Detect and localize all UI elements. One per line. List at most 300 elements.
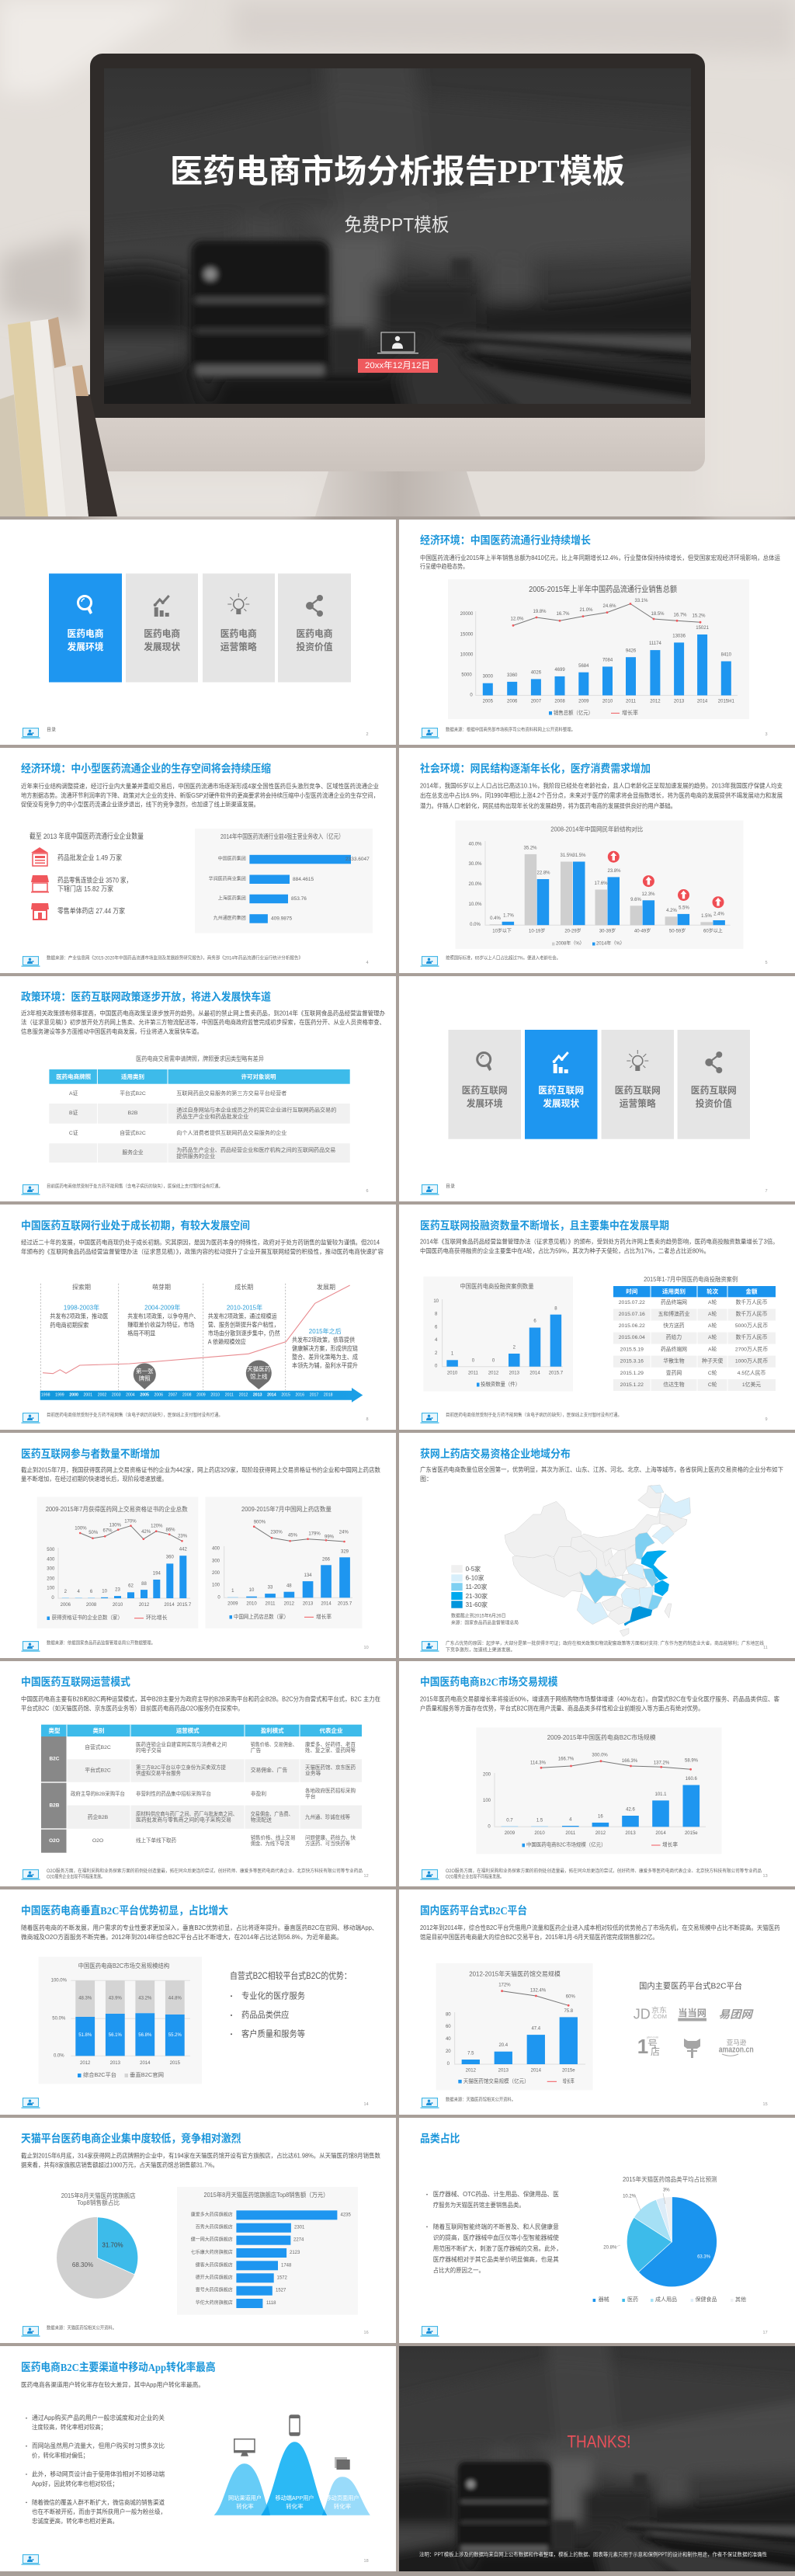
table rows: A轮 (708, 1333, 717, 1340)
footer: O2O服务方面，在福利采购和业务探索方面的前例处创造量最，拓在同众后更连的尝试，创好药师、康爱多等医药电商代表企业、北京快方科技有限公司等专业药品 (47, 1868, 363, 1874)
chart panel: case count (423, 1277, 573, 1392)
pie chart: categories (627, 2197, 717, 2287)
intro text (420, 1238, 779, 1255)
pie legend: 医药 (627, 2296, 638, 2303)
x axis labels: 2006 (507, 699, 518, 704)
trend line (43, 1285, 350, 1374)
bar values: 266 (322, 1557, 331, 1562)
wall background (0, 0, 795, 516)
row: enterprise B2B: 物流配送 (251, 1816, 272, 1823)
x axis labels (80, 2061, 181, 2066)
bullet text: 占比大的原因之一。 (433, 2266, 484, 2274)
chart panel: age structure (455, 820, 744, 949)
chart panel: online pharmacies (205, 1497, 362, 1629)
enterprise counts: 下辖门店 15.82 万家 (57, 884, 113, 893)
store labels: 华佗大药房旗舰店 (196, 2300, 233, 2306)
row: government B2B: 政府主导的B2B采购平台 (71, 1790, 125, 1797)
legend (552, 940, 625, 947)
growth line: 23% (178, 1535, 188, 1539)
footer (421, 727, 768, 739)
footer: 7 (765, 1189, 768, 1194)
growth line: 137.2% (654, 1761, 670, 1766)
pie labels: 20.8% (603, 2245, 617, 2250)
footer (22, 2098, 369, 2108)
slide 8: growth stages timeline (0, 1205, 396, 1430)
heading: 国内医药平台式B2C平台 (420, 1904, 527, 1917)
arrow: year axis: 2000 (69, 1392, 78, 1397)
legend: 增长率 (622, 709, 638, 716)
y axis (433, 1299, 563, 1369)
x axis labels: 2013 (303, 1602, 314, 1607)
map legend: 0-5家 (466, 1565, 481, 1573)
arrow: year axis: 2014 (267, 1392, 276, 1397)
footer: 数据来源：天猫医药馆相关公开资料。 (446, 2097, 516, 2103)
footer (22, 727, 369, 739)
slide 7: contents two (399, 976, 795, 1201)
footer: 16 (364, 2331, 369, 2335)
chart panel: certificates (37, 1497, 198, 1629)
bar values: 4.2% (666, 909, 677, 913)
row: self-run B2C (85, 1741, 356, 1754)
arrow: year axis: 1998 (41, 1392, 50, 1397)
footer: 数据来源：天猫医药馆相关公开资料。 (47, 2325, 116, 2331)
logo: yhd: yhd.com (647, 2035, 659, 2039)
table rows: 2015.07.16 (619, 1312, 645, 1317)
intro text (21, 1466, 380, 1483)
map legend: 6-10家 (466, 1573, 484, 1581)
intro text: 医药电商各渠道用户转化率存在较大差异，其中App用户转化率最高。 (21, 2381, 204, 2389)
pin: first licence: 牌照 (139, 1375, 151, 1382)
stage 2 text: 共发布1项政策，以争夺用户、 (127, 1312, 199, 1320)
menu card: strategy: 医药电商 (220, 627, 257, 639)
table rows: 信达生物 (663, 1381, 685, 1388)
legend: 2014年（%） (596, 940, 625, 947)
y axis: 4 (435, 1338, 438, 1343)
store labels: 康爱多大药房旗舰店 (191, 2211, 233, 2217)
footer: 8 (366, 1417, 369, 1422)
x axis labels: 40-49岁 (634, 928, 651, 934)
growth line: 18.5% (651, 612, 665, 617)
row: self-run B2C: 自营式B2C (85, 1743, 111, 1750)
growth line: 33.1% (634, 599, 648, 603)
table title: 2015年1-7月中国医药电商投融资案例 (644, 1275, 738, 1283)
segment values (78, 1996, 182, 2038)
icon: up arrows (608, 851, 724, 908)
x axis labels: 2012 (80, 2061, 91, 2066)
growth line: 120% (151, 1524, 163, 1528)
arrow: year axis: 2012 (239, 1392, 248, 1397)
growth line: 114.3% (530, 1761, 547, 1766)
curves: channel conversion: 网站渠道用户 (228, 2494, 262, 2501)
date tag (358, 359, 438, 373)
menu card: strategy (602, 1030, 674, 1139)
x axis labels: 2012 (466, 2069, 477, 2074)
advantages list: 药品品类供应 (241, 2009, 289, 2020)
menu card: value: 投资价值 (297, 641, 332, 652)
bars (483, 634, 731, 695)
chart title: 2009-2015年7月获得医药网上交易资格证书的企业总数 (46, 1505, 188, 1513)
menu card: environment: 医药互联网 (462, 1084, 508, 1096)
footer: 14 (364, 2102, 369, 2107)
timeline (40, 1283, 363, 1403)
bars 2014 (502, 862, 725, 925)
x axis labels (505, 1831, 698, 1836)
x axis labels: 2010 (246, 1602, 257, 1607)
y axis: 6 (435, 1325, 438, 1330)
table header: 盈利模式 (261, 1726, 284, 1734)
curves: channel conversion: 转化率 (236, 2502, 254, 2510)
intro text: 平台式B2C（如天猫医药馆、京东医药业务等）目前医药电商药品O2O服务仍在探索中。 (21, 1704, 244, 1712)
stage 1 text: 1998-2003年 (64, 1303, 99, 1311)
bar values: 1.5 (536, 1818, 543, 1823)
stage 2 text: 2004-2009年 (144, 1303, 180, 1311)
logo: JD: 京东 (651, 2005, 667, 2015)
enterprise counts: 零售单体药店 27.44 万家 (57, 906, 125, 915)
curves: channel conversion: 移动页面用户 (326, 2494, 359, 2501)
y axis: 10000 (460, 652, 474, 657)
bar values (467, 2009, 574, 2056)
x axis labels: 10-19岁 (529, 928, 545, 934)
bar values: 5.5% (679, 906, 689, 910)
bar values: 160.6 (686, 1777, 697, 1782)
slide 9: financing (399, 1205, 795, 1430)
bullet text: App好，因此转化率也相对较低； (32, 2480, 118, 2487)
x axis labels: 2014 (140, 2061, 151, 2066)
x axis labels: 2012 (595, 1831, 606, 1836)
bars (249, 855, 351, 923)
wall shadows (0, 0, 795, 516)
intro text: 据来看，共有8家旗舰店销售额超过1000万元，占天猫医药馆总销售额31.7%。 (21, 2161, 218, 2168)
monitor (73, 45, 722, 516)
arrow: year axis: 2011 (225, 1392, 234, 1397)
table rows: 提供服务的企业 (176, 1152, 216, 1159)
row: enterprise B2B: 医药批发商与零售商之间的电子采购交易 (136, 1816, 231, 1823)
stage 3 text: 2010-2015年 (227, 1303, 262, 1311)
y axis: 0.0% (470, 923, 481, 927)
bars (502, 1785, 700, 1827)
bar values: 8 (554, 1306, 557, 1311)
row: self-run B2C: 广告 (251, 1747, 261, 1754)
bar values: 2 (64, 1590, 68, 1594)
bullet text: 识的提高，医疗器械中血压仪等小型智能器械使 (433, 2234, 559, 2241)
table rows: A轮 (708, 1310, 717, 1317)
menu card: status (126, 573, 198, 682)
bullet text: 忠诚度更高，转化率也相对更高。 (32, 2517, 118, 2525)
arrow: year axis: 2002 (98, 1392, 106, 1397)
arrow: year axis: 2016 (296, 1392, 304, 1397)
table rows: 通过自身网站与本企业成员之外的其它企业进行互联网药品交易的 (176, 1106, 337, 1114)
bars 2008 (490, 854, 713, 925)
cover title: 医药电商市场分析报告PPT模板 (170, 154, 625, 190)
table header: 适用类别 (121, 1072, 144, 1080)
row: platform B2C: 平台式B2C (85, 1766, 111, 1774)
bars (446, 1315, 561, 1367)
footer: 广东占优势的原因：起步早，大部分是第一批获得许可证；政府在相关政策扣物流配套政策等方面相对支持; 广东作为医药制造业大省，商品能够利；广东地区线 (446, 1640, 764, 1646)
legend: 投融资数量（件） (481, 1381, 520, 1387)
footer: 目录 (47, 727, 56, 733)
heading: 医药互联网参与者数量不断增加 (21, 1448, 160, 1461)
heading: 社会环境：网民结构逐渐年长化，医疗消费需求增加 (420, 763, 651, 775)
chart panel: stacked share (39, 1957, 202, 2084)
footer: 数据来源：依据国家食品药品监督管理总局公开数据整理。 (47, 1640, 155, 1646)
table rows: B证 (69, 1110, 78, 1116)
bar values: 88 (141, 1582, 147, 1587)
blue bars (75, 2013, 185, 2056)
y axis: 400 (212, 1546, 220, 1551)
x axis labels: 2014 (529, 1371, 540, 1375)
chart title: 2012-2015年天猫医药馆交易规模 (469, 1969, 561, 1977)
pin: tmall online: 天猫医药 (247, 1365, 271, 1373)
intro text: 中国医药电商主要有B2B和B2C两种运营模式，其中B2B主要分为政府主导的B2B采购平台和药企B2B。B2C分为自营式和平台式，B2C 主力在 (21, 1695, 380, 1702)
growth line: 19.8% (533, 610, 547, 614)
logo: tmall cat (684, 2039, 700, 2058)
bar values: 23 (115, 1588, 120, 1593)
row: government B2B: 非盈利 (251, 1790, 266, 1797)
icon: chain store (31, 875, 49, 893)
growth line: 58.9% (685, 1759, 699, 1764)
footer (22, 955, 369, 967)
bar values: 0 (492, 1358, 495, 1363)
chart title: 中国医药电商投融资案例数量 (460, 1282, 534, 1290)
row: platform B2C: 第三方B2C平台以中立身份为买卖双方提 (136, 1764, 226, 1771)
y axis (460, 611, 738, 697)
x axis labels: 2015 (170, 2061, 181, 2066)
logo: JD (634, 2005, 667, 2022)
y axis: 30.0% (468, 862, 482, 867)
bar values: 1748 (281, 2263, 292, 2268)
table header: 适用类别 (662, 1288, 686, 1295)
row: platform B2C: 交易佣金、广告 (251, 1766, 287, 1774)
bars (227, 1557, 350, 1597)
slide 15: platform B2C (399, 1889, 795, 2115)
bar values: 12.3% (641, 892, 655, 897)
pin: tmall online: 馆上线 (250, 1372, 268, 1380)
table rows: 服务企业 (122, 1149, 144, 1156)
heading: 中国医药互联网运营模式 (21, 1676, 130, 1688)
bar values: 1 (451, 1352, 454, 1357)
bar values: 31.5% (572, 853, 586, 858)
x axis labels: 2006 (61, 1603, 71, 1608)
table rows (619, 1298, 768, 1388)
bullet text: 价，转化率相对偏低； (32, 2451, 89, 2459)
x axis labels: 2007 (531, 699, 542, 704)
y axis (51, 1978, 190, 2058)
bar values: 3000 (483, 674, 494, 679)
row: government B2B: 各地政府医药招标采购 (305, 1787, 356, 1794)
y axis (446, 2012, 585, 2067)
footer: 17 (763, 2331, 768, 2335)
growth line: 45% (288, 1534, 298, 1538)
table rows: 种子天使 (702, 1358, 723, 1364)
bar labels: 华润医药商业集团 (209, 875, 246, 881)
bar values (266, 2213, 352, 2306)
row: government B2B: 平台 (305, 1792, 316, 1800)
row: platform B2C (85, 1764, 356, 1777)
menu card: active status: 医药互联网 (538, 1084, 584, 1096)
table rows: 药品生产企业和药品批发企业 (176, 1113, 249, 1120)
icon: presenter laptop (377, 332, 418, 354)
table header (626, 1288, 758, 1295)
growth line: 24.6% (602, 604, 616, 609)
table header: 轮次 (706, 1288, 719, 1295)
table rows: 4.5亿人民币 (738, 1369, 766, 1376)
arrow: year axis: 2009 (196, 1392, 206, 1397)
growth line (75, 1519, 188, 1542)
pie chart: top eight share (57, 2217, 138, 2299)
footer (421, 1184, 768, 1195)
bar labels: 中国医药集团 (218, 856, 246, 862)
menu card: active status (525, 1030, 598, 1139)
x axis labels (61, 1603, 192, 1608)
footer: 12 (364, 1874, 369, 1879)
store labels: 德开大药房旗舰店 (196, 2274, 233, 2280)
legend (230, 1613, 332, 1620)
row: O2O (92, 1834, 356, 1847)
x axis labels (483, 699, 734, 704)
legend: 综合B2C平台 (83, 2071, 116, 2078)
stage 1 text: 共发布2项政策，推动医 (50, 1312, 108, 1320)
bar values: 2123 (290, 2251, 300, 2255)
store labels: 健一网大药房旗舰店 (191, 2237, 233, 2243)
stage 1 text: 药电商初期探索 (50, 1321, 89, 1329)
table rows: 自营式B2C (120, 1129, 146, 1136)
growth line (510, 599, 706, 627)
pie title (61, 2192, 136, 2206)
legend: 增长率 (662, 1841, 678, 1848)
footer: 2 (366, 732, 369, 737)
x axis labels: 2013 (509, 1371, 520, 1375)
footer: O2O服务方面，在福利采购和业务探索方面的前例处创造量最，拓在同众后更连的尝试，创好药师、康爱多等医药电商代表企业、北京快方科技有限公司等专业药品 (446, 1868, 762, 1874)
y axis: 300 (212, 1559, 220, 1564)
bar values: 0.4% (490, 916, 501, 921)
bar values: 6 (90, 1590, 93, 1594)
segment values: 56.1% (109, 2033, 122, 2038)
bar labels: 853.76 (291, 896, 307, 902)
row: self-run B2C: 的电子交易 (136, 1747, 161, 1754)
intro text (420, 1695, 779, 1712)
growth line: 170% (124, 1519, 137, 1524)
cover panel (0, 0, 795, 516)
bar values: 3360 (507, 673, 518, 678)
segment values: 43.9% (109, 1996, 122, 2001)
growth line: 99% (325, 1535, 335, 1539)
intro text (21, 1924, 378, 1941)
y axis: 20000 (460, 612, 474, 617)
x axis labels (492, 928, 723, 934)
chart panel: sales (448, 579, 749, 719)
operating model table (41, 1725, 362, 1853)
x axis labels: 10岁以下 (492, 928, 512, 934)
table title: 医药电商交易需申请牌照，牌照要求因类型略有差异 (136, 1055, 264, 1062)
footer: 数据来源：根据中国商务部市场秩序司公布资料和网上公开资料整理。 (446, 727, 575, 733)
row groups: O2O (49, 1838, 60, 1844)
growth line: 60% (566, 1995, 575, 2000)
logo: amazon: 亚马逊 (727, 2039, 747, 2046)
stage names: 发展期 (317, 1283, 335, 1291)
bullet text: 也在不断被开拓，而由于其所获用户一般为粉丝级， (32, 2508, 166, 2515)
stage 4 text: 2015年之后 (309, 1327, 342, 1335)
table header: 医药电商牌照 (56, 1072, 92, 1080)
y axis: 0 (447, 2062, 450, 2067)
enterprise counts: 药品零售连锁企业 3570 家， (57, 875, 132, 884)
footer (22, 1412, 369, 1424)
row: O2O: 佣金、为线下导流 (251, 1840, 290, 1847)
bar values: 194 (153, 1572, 161, 1577)
heading: 经济环境：中小型医药流通企业的生存空间将会持续压缩 (21, 763, 271, 775)
logo: yhd: 号 (647, 2038, 658, 2050)
store labels: 百秀大药房旗舰店 (196, 2224, 233, 2230)
x axis labels: 2005 (483, 699, 494, 704)
icon: monitor (234, 2439, 255, 2456)
pie title: 2015年天猫医药馆品类平均占比预测 (623, 2175, 717, 2183)
table rows: 2015.5.19 (620, 1347, 644, 1353)
table header (56, 1072, 276, 1080)
x axis labels: 2011 (626, 699, 637, 704)
x axis labels: 2014 (531, 2069, 542, 2074)
intro text: 地方割据态势。流通环节利润率的下降、政策对大企业的支持、新版GSP对硬件软件的更高要求将会持续压缩中小型医药流通企业的生存空间， (21, 791, 379, 799)
bar values (490, 846, 724, 921)
curves: channel conversion: 转化率 (334, 2502, 352, 2510)
stage 4 text: 整合、差异化策略为主、成 (292, 1353, 358, 1361)
stage 4 text: 健康解决方案，形成供应链 (292, 1344, 358, 1352)
arrow: year axis: 2003 (112, 1392, 121, 1397)
bullet text: 医疗器械、OTC药品、计生用品、保健用品、医 (433, 2190, 559, 2198)
footer: 目录 (446, 1184, 455, 1190)
footer: 下竞争激烈，加速线上渠道发展。 (446, 1647, 516, 1653)
x axis labels: 2012 (650, 699, 661, 704)
footer (421, 2327, 768, 2337)
bar values: 4 (78, 1590, 81, 1594)
y axis: 0 (470, 693, 473, 697)
intro text: 近3年相关政策颁布频率提高，中国医药电商政策呈逐步放开的趋势。从最初的禁止网上售卖药品，到2014年《互联网食品药品经营监督管理办 (21, 1010, 385, 1017)
gray bars (75, 1980, 185, 2017)
table rows: 2015.06.04 (619, 1335, 645, 1340)
store labels: 七乐康大药房旗舰店 (191, 2249, 233, 2255)
legend: 中国医药电商B2C市场规模（亿元） (526, 1841, 606, 1848)
slide 13: B2C market size (399, 1661, 795, 1886)
arrow: year axis: 2006 (154, 1392, 163, 1397)
table rows: 2015.07.22 (619, 1300, 645, 1305)
row: government B2B (71, 1787, 356, 1800)
intro text (21, 782, 379, 808)
bar values: 2274 (293, 2238, 304, 2243)
table header (48, 1726, 343, 1734)
y axis: 300 (47, 1567, 55, 1572)
legend: 2008年（%） (556, 940, 585, 947)
x axis labels: 2010 (534, 1831, 545, 1836)
footer (421, 1868, 768, 1880)
intro text: 2015年医药电商交易额增长率将接近60%，增速高于网络购物市场整体增速（40%左右）。自营式B2C在专业化医疗服务、药品品类供应、客 (420, 1695, 779, 1702)
map legend (451, 1565, 488, 1608)
y axis: 100.0% (51, 1978, 68, 1983)
table header: 类别 (93, 1726, 104, 1734)
arrow: year axis (40, 1388, 363, 1403)
bar values: 33 (268, 1585, 273, 1590)
intro text (420, 1924, 780, 1941)
pie chart: top eight share: 68.30% (72, 2261, 93, 2268)
logo: amazon: amazon.cn (719, 2046, 754, 2055)
x axis labels: 20-29岁 (564, 928, 581, 934)
map legend: 21-30家 (466, 1592, 488, 1600)
logo: amazon (719, 2039, 754, 2056)
x axis labels: 2015e (685, 1831, 698, 1836)
bars (62, 1556, 186, 1598)
bar labels: 九州通医药集团 (214, 915, 246, 921)
logo: dangdang: 当当网 (678, 2007, 706, 2018)
slide 18: conversion (0, 2346, 396, 2571)
row: platform B2C: 供虚拟交易平台服务 (136, 1769, 181, 1777)
pie labels: 63.3% (697, 2255, 711, 2260)
